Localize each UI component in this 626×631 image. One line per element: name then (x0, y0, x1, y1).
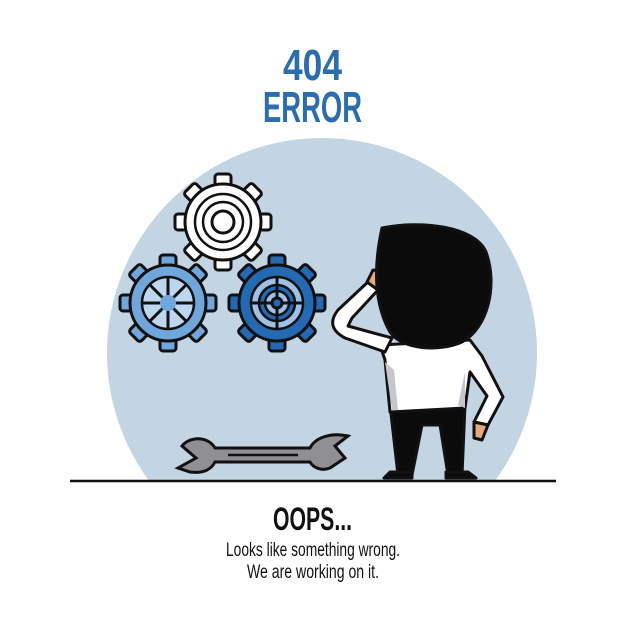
hair (377, 225, 491, 348)
icon: dark blue gear (229, 255, 325, 351)
text block: message: Looks like something wrong. (226, 540, 400, 561)
text block: message: We are working on it. (247, 562, 379, 583)
icon: light blue gear (120, 255, 216, 351)
raised arm (333, 280, 392, 352)
hands (367, 270, 388, 290)
person (333, 225, 503, 478)
legs (390, 405, 465, 475)
shirt (380, 340, 503, 425)
text block: message (226, 540, 400, 583)
title: ERROR: ERROR (263, 83, 362, 132)
heading: OOPS: OOPS... (273, 501, 352, 537)
title: 404: 404 (283, 41, 342, 90)
icon: wrench (178, 435, 348, 472)
background circle (107, 138, 537, 480)
ground line (70, 480, 556, 482)
icon: white gear (175, 174, 271, 270)
